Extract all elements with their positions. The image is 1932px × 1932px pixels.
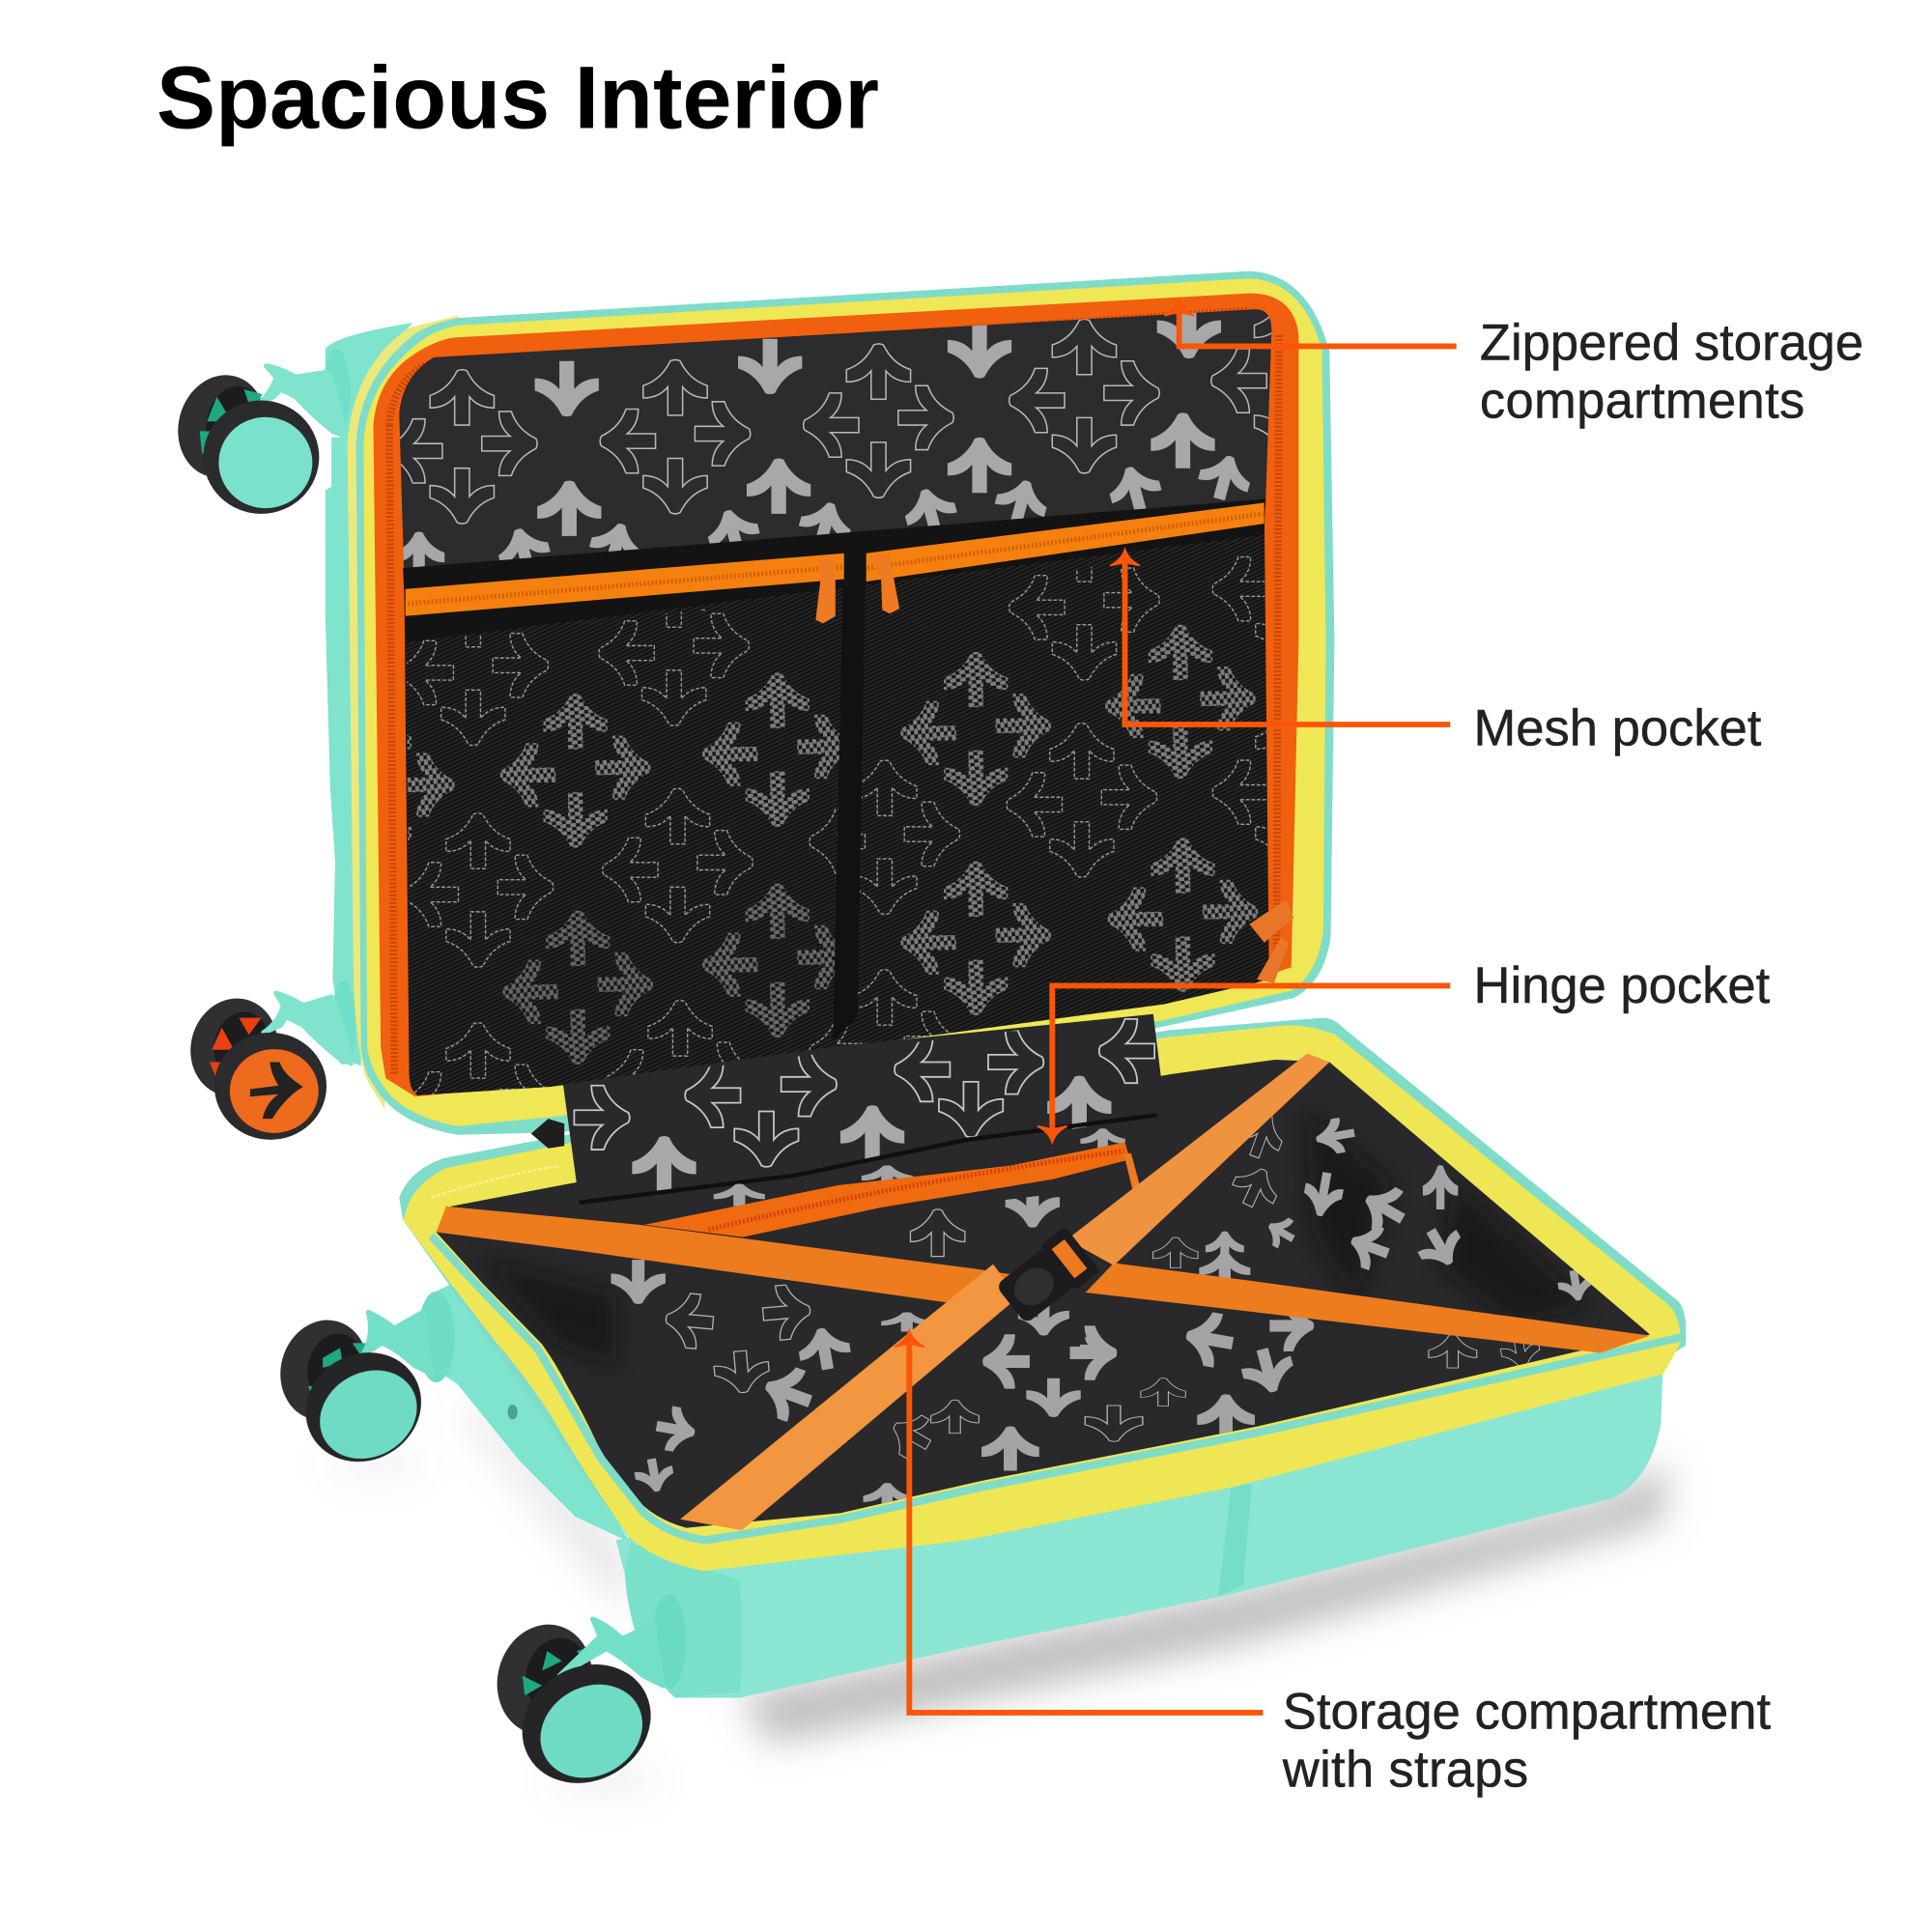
lid back shell <box>326 323 412 1065</box>
upper lining <box>399 309 1271 579</box>
horizontal strap left <box>437 1207 1016 1306</box>
arrow logo <box>250 1062 303 1119</box>
caster wheel: front <box>485 1595 686 1806</box>
zipper edge <box>399 1018 1686 1540</box>
stitched lip line <box>431 1166 560 1198</box>
side panel <box>431 1284 631 1543</box>
housing <box>417 1292 455 1382</box>
hinge fabric <box>563 1014 1166 1233</box>
lining <box>437 1060 1650 1528</box>
hinge pocket zipper <box>644 1142 1140 1237</box>
upper lining pattern <box>400 313 1271 568</box>
rivet <box>508 1405 518 1419</box>
front wheel <box>500 1641 672 1806</box>
caster wheel: lower left with logo <box>180 980 356 1140</box>
leader: zippered storage compartments <box>1164 299 1457 346</box>
front wheel <box>203 401 319 514</box>
caster wheel: upper left <box>167 349 350 514</box>
hub <box>303 1353 433 1476</box>
mesh pocket <box>404 499 1269 1095</box>
label: zippered storage compartments: Zippered storage <box>1480 314 1863 371</box>
side zipper pulls <box>1249 899 1293 983</box>
wheel housing <box>625 1543 742 1698</box>
front wheel <box>214 1033 327 1140</box>
center seam <box>833 535 867 1041</box>
housing <box>331 980 356 1065</box>
yellow lip <box>363 278 1325 1126</box>
housing <box>323 349 350 435</box>
label: mesh pocket: Mesh pocket <box>1474 700 1762 757</box>
zipper <box>431 1236 1683 1540</box>
leader: mesh pocket <box>1110 550 1450 724</box>
floor shadow <box>327 1399 1665 1789</box>
buckle <box>993 1226 1100 1327</box>
rear wheel <box>485 1614 604 1746</box>
rear wheel <box>270 1310 379 1430</box>
bracket <box>259 366 345 437</box>
label: hinge pocket: Hinge pocket <box>1474 957 1771 1014</box>
hub <box>230 1049 319 1133</box>
yellow lip <box>403 1025 1681 1571</box>
mesh pocket zipper <box>406 554 844 616</box>
diagonal strap upper <box>1067 1054 1329 1265</box>
hinge pocket <box>531 1014 1161 1206</box>
diagonal strap lower <box>680 1264 1018 1530</box>
bracket <box>362 1312 431 1374</box>
housing <box>652 1595 686 1688</box>
lid shell <box>304 271 1363 1177</box>
leader: hinge pocket <box>1037 985 1450 1142</box>
horizontal strap right <box>1086 1263 1650 1353</box>
hinge seam <box>579 1115 1157 1203</box>
lower shell rim and lining <box>399 1018 1686 1571</box>
caster wheel: rear right <box>270 1292 455 1483</box>
hub <box>218 417 312 508</box>
front wheel <box>286 1332 441 1483</box>
mesh pocket pattern <box>407 556 1267 1094</box>
label: zippered storage compartments: compartments <box>1480 372 1805 429</box>
lining pattern <box>480 1108 1596 1511</box>
label: storage compartment with straps: with straps <box>1282 1741 1528 1798</box>
pale outer lip <box>348 316 458 1109</box>
fabric folds <box>480 1109 1589 1368</box>
bracket <box>264 993 352 1064</box>
rear wheel <box>167 365 277 488</box>
label: storage compartment with straps: Storage compartment <box>1283 1684 1771 1741</box>
title: Spacious Interior <box>156 49 879 148</box>
hinge clip <box>531 1119 564 1149</box>
lower flap pattern <box>714 1128 1125 1206</box>
hub <box>524 1666 660 1796</box>
panel seam <box>1218 1484 1252 1596</box>
zipper pulls <box>815 557 836 623</box>
straps <box>437 1054 1650 1530</box>
hinge pattern <box>574 1019 1154 1191</box>
orange zipper frame <box>373 294 1298 1096</box>
front panel <box>616 1355 1663 1698</box>
leader: storage compartment with straps <box>895 1331 1263 1713</box>
pocket band <box>403 499 1265 642</box>
zipper pull <box>1123 1153 1140 1189</box>
lower shell body <box>431 1284 1663 1698</box>
bracket <box>559 1619 663 1686</box>
rear wheel <box>180 988 289 1106</box>
zipper edge <box>356 271 1334 1135</box>
